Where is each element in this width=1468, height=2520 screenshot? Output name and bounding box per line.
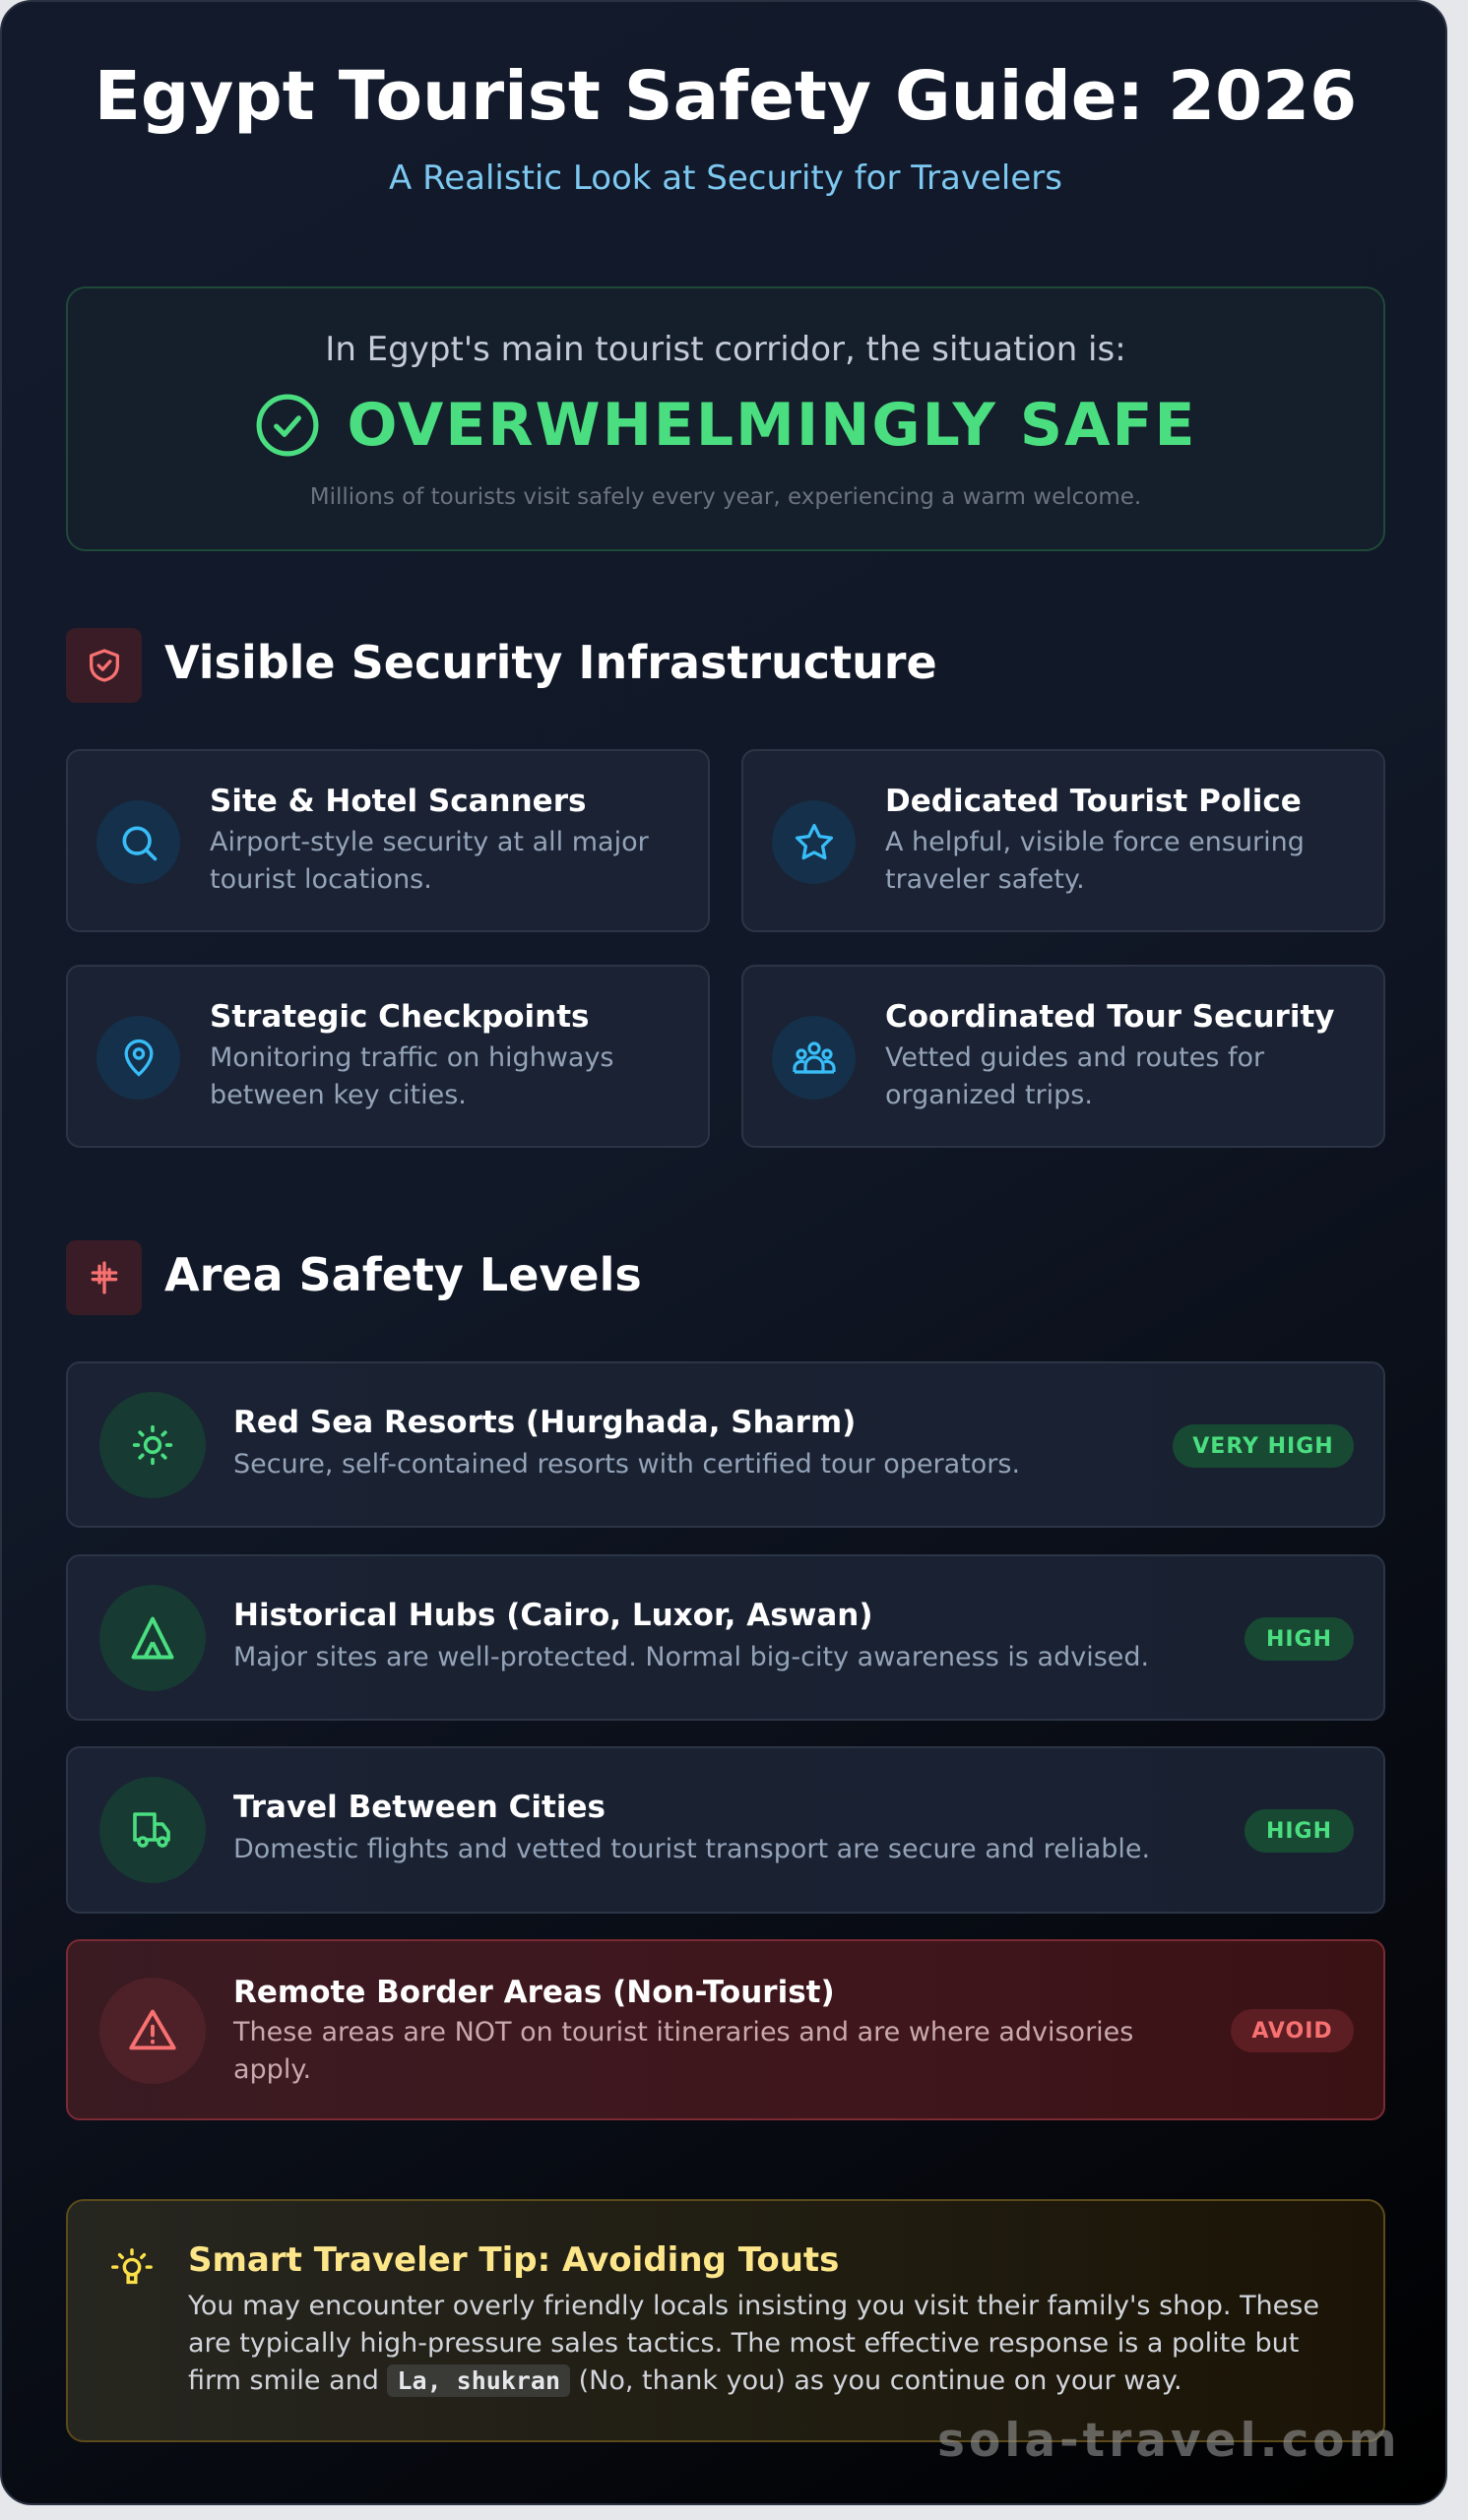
card: scanners: Site & Hotel Scanners xyxy=(210,784,586,819)
panel: safety verdict xyxy=(66,286,1385,551)
verdict headline: OVERWHELMINGLY SAFE xyxy=(347,391,1196,460)
row: Red Sea Resorts: Red Sea Resorts (Hurghada, Sharm) xyxy=(233,1405,856,1440)
panel: smart traveler tip: Smart Traveler Tip: Avoiding Touts xyxy=(188,2240,839,2280)
card: tourist police: A helpful, visible force ensuring traveler safety. xyxy=(885,827,1305,895)
row: Remote Border Areas: These areas are NOT on tourist itineraries and are where advisories apply. xyxy=(233,2017,1133,2085)
icon: light bulb xyxy=(111,2248,153,2284)
heading: Area Safety Levels: Area Safety Levels xyxy=(164,1248,642,1301)
panel: smart traveler tip: You may encounter overly friendly locals insisting you visit their family's shop. These are typically high-pressure sales tactics. The most effective response is a polite but firm smile and La, shukran (No, thank you) as you continue on your way. xyxy=(188,2291,1319,2396)
card: checkpoints: Monitoring traffic on highways between key cities. xyxy=(210,1042,613,1110)
icon: magnifier xyxy=(96,800,180,884)
card: tour security xyxy=(741,965,1385,1148)
icon: sun xyxy=(99,1392,206,1498)
icon: star xyxy=(772,800,856,884)
row: Red Sea Resorts: Secure, self-contained resorts with certified tour operators. xyxy=(233,1449,1020,1480)
icon: group xyxy=(772,1016,856,1100)
badge: very high: VERY HIGH xyxy=(1192,1433,1334,1459)
card: scanners xyxy=(66,749,710,932)
card: tourist police xyxy=(741,749,1385,932)
row: Remote Border Areas: Remote Border Areas (Non-Tourist) xyxy=(233,1975,835,2010)
row: Historical Hubs: Major sites are well-protected. Normal big-city awareness is advised. xyxy=(233,1642,1149,1672)
title: Egypt Tourist Safety Guide: 2026 xyxy=(95,57,1357,136)
verdict intro text: In Egypt's main tourist corridor, the situation is: xyxy=(325,330,1126,369)
verdict note: Millions of tourists visit safely every year, experiencing a warm welcome. xyxy=(310,484,1141,510)
badge: very high xyxy=(1173,1424,1354,1468)
icon: warning xyxy=(99,1978,206,2084)
icon: map pin xyxy=(96,1016,180,1100)
heading: Visible Security Infrastructure xyxy=(66,628,937,703)
card: checkpoints: Strategic Checkpoints xyxy=(210,999,589,1035)
icon: pyramid xyxy=(99,1585,206,1691)
badge: high xyxy=(1245,1617,1354,1661)
row: Historical Hubs xyxy=(66,1554,1385,1721)
badge: avoid xyxy=(1231,2009,1354,2052)
badge: high xyxy=(1245,1809,1354,1853)
card: tour security: Vetted guides and routes for organized trips. xyxy=(885,1042,1264,1110)
row: Red Sea Resorts xyxy=(66,1361,1385,1528)
card: tour security: Coordinated Tour Security xyxy=(885,999,1334,1035)
badge: high: HIGH xyxy=(1266,1626,1332,1652)
watermark: sola-travel.com xyxy=(937,2414,1401,2468)
card: scanners: Airport-style security at all major tourist locations. xyxy=(210,827,649,895)
row: Travel Between Cities: Domestic flights and vetted tourist transport are secure and reliable. xyxy=(233,1834,1150,1864)
icon: shield xyxy=(66,628,142,703)
subtitle: A Realistic Look at Security for Travelers xyxy=(389,158,1062,198)
panel: smart traveler tip xyxy=(66,2199,1385,2442)
icon: signpost xyxy=(66,1240,142,1315)
card: tourist police: Dedicated Tourist Police xyxy=(885,784,1302,819)
card: checkpoints xyxy=(66,965,710,1148)
row: Remote Border Areas xyxy=(66,1939,1385,2120)
icon: vehicle xyxy=(99,1777,206,1883)
heading: Area Safety Levels xyxy=(66,1240,642,1315)
heading: Visible Security Infrastructure: Visible Security Infrastructure xyxy=(164,636,937,689)
row: Travel Between Cities xyxy=(66,1746,1385,1914)
row: Travel Between Cities: Travel Between Cities xyxy=(233,1790,606,1825)
icon: check circle xyxy=(256,394,319,457)
badge: avoid: AVOID xyxy=(1251,2018,1333,2044)
row: Historical Hubs: Historical Hubs (Cairo, Luxor, Aswan) xyxy=(233,1598,872,1633)
badge: high: HIGH xyxy=(1266,1819,1332,1843)
